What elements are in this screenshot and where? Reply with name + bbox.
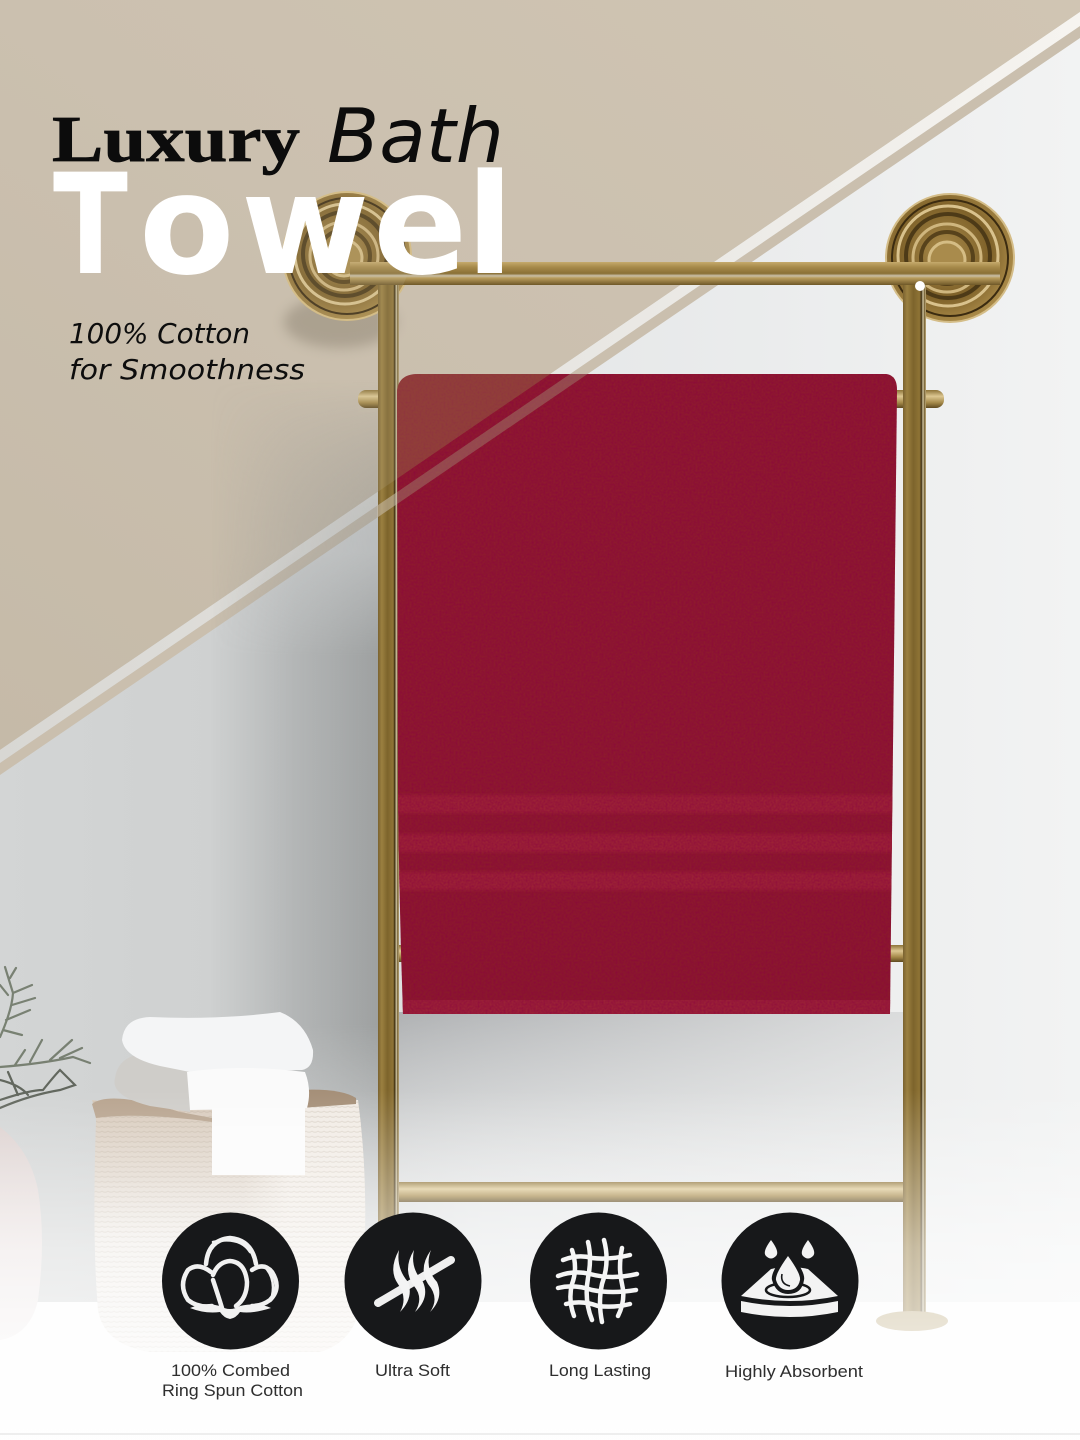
heading line: Towel: T [53,144,128,306]
basket with towels [92,1012,365,1352]
icon: ultra soft fibres [344,1212,482,1350]
heading [52,92,514,306]
towel rack [283,192,1014,1340]
heading line: Luxury Bath: Luxury [52,103,300,176]
plant [0,967,90,1108]
feature labels: Ring Spun Cotton [162,1381,303,1400]
tan diagonal panel [0,0,1080,775]
icon: highly absorbent [722,1212,858,1350]
folded towels [114,1012,313,1175]
tan veil on rack [286,193,410,518]
subheading: 100% Cotton [69,318,250,350]
feature icons row [162,1212,858,1350]
feature labels: Long Lasting [549,1361,651,1380]
translucent tan overlay on towel [397,374,588,504]
rosette left [283,192,411,320]
heading line: Luxury Bath: Bath [327,92,504,180]
icon: cotton boll [162,1212,299,1350]
feature labels: Ultra Soft [375,1361,450,1380]
heading line: Luxury Bath [52,92,504,180]
heading line: Towel: owel [139,144,514,306]
icon: long lasting weave [530,1212,667,1350]
feature labels: 100% Combed [171,1361,290,1380]
feature labels: Highly Absorbent [725,1362,863,1381]
floor line [0,1433,1080,1435]
wall shading [0,380,1080,1440]
rosette right [886,194,1014,322]
subheading [69,318,305,386]
subheading: for Smoothness [69,354,305,386]
towel stripes [390,795,905,1014]
bottom white fade [0,1090,1080,1440]
towel [390,370,905,1020]
vase [0,1127,42,1340]
basket body [92,1090,365,1352]
feature labels [162,1361,863,1400]
